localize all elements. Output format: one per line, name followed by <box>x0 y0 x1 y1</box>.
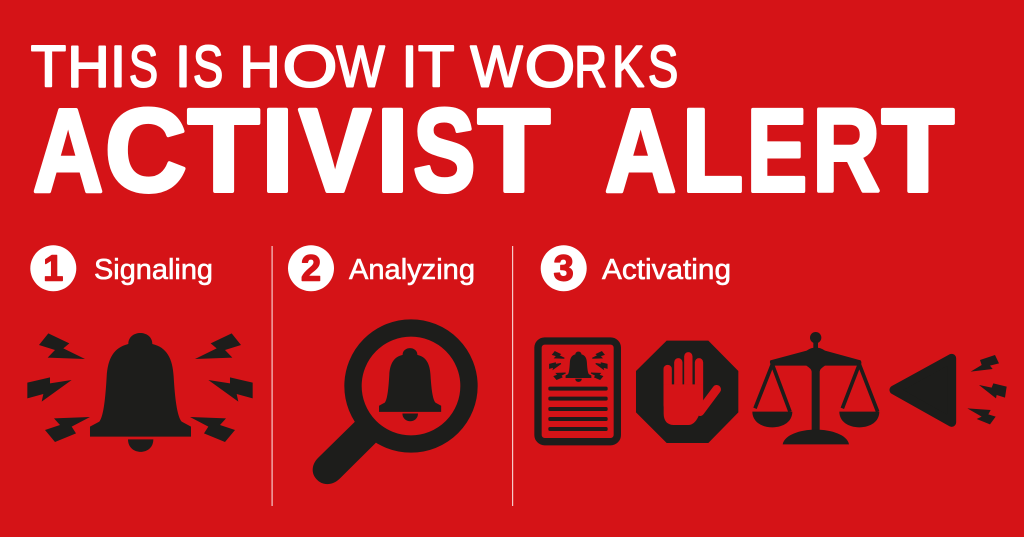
panel: analyzing <box>288 245 475 484</box>
title line: activist alert: L <box>682 85 743 217</box>
step 3 number badge <box>541 245 587 291</box>
icon: megaphone with bolts <box>894 355 1007 424</box>
title line: activist alert: E <box>747 85 807 217</box>
title line: activist alert: C <box>105 85 187 217</box>
title <box>31 34 954 217</box>
title line: this is how it works: W <box>336 34 385 99</box>
title line: this is how it works: O <box>282 34 338 99</box>
icon: magnifying glass over bell <box>313 328 469 484</box>
title line: this is how it works: I <box>402 34 418 99</box>
step 3 number badge: 3 <box>554 248 574 288</box>
title line: activist alert: T <box>188 85 260 217</box>
title line: activist alert: A <box>33 85 103 217</box>
panel: activating <box>538 245 1007 444</box>
title line: this is how it works: S <box>193 34 223 99</box>
divider: between analyzing and activating <box>512 246 513 506</box>
title line: this is how it works: H <box>239 34 281 99</box>
title line: this is how it works: I <box>110 34 126 99</box>
title line: activist alert: S <box>413 85 476 217</box>
title line: activist alert: I <box>376 85 409 217</box>
icon: ringing bell <box>27 333 253 452</box>
title line: activist alert: I <box>261 85 294 217</box>
title line: activist alert: A <box>605 85 676 217</box>
step 1 label: Signaling <box>94 254 213 286</box>
step 2 label: Analyzing <box>349 254 475 286</box>
step 2 number badge: 2 <box>301 248 321 288</box>
icon: scales of justice <box>752 332 879 444</box>
title line: activist alert: V <box>299 85 371 217</box>
title line: this is how it works: S <box>648 34 678 99</box>
step 2 number badge <box>288 245 334 291</box>
step 1 number badge: 1 <box>43 248 63 288</box>
icon: stop sign with hand <box>636 341 738 443</box>
title line: this is how it works: K <box>612 34 644 99</box>
step 1 number badge <box>30 245 76 291</box>
title line: activist alert: T <box>882 85 954 217</box>
title line: this is how it works: S <box>129 34 158 99</box>
panel: signaling <box>27 245 253 452</box>
title line: this is how it works: T <box>418 34 454 99</box>
title line: this is how it works: I <box>175 34 191 99</box>
title line: activist alert: T <box>478 85 550 217</box>
title line: activist alert: R <box>812 85 880 217</box>
title line: this is how it works: W <box>470 34 523 99</box>
step 3 label: Activating <box>602 254 731 286</box>
title line: this is how it works: R <box>574 34 607 99</box>
icon: alert document <box>538 341 617 442</box>
title line: this is how it works: T <box>31 34 66 99</box>
divider: between signaling and analyzing <box>272 246 273 506</box>
title line: this is how it works: H <box>67 34 110 99</box>
title line: this is how it works: O <box>525 34 575 99</box>
